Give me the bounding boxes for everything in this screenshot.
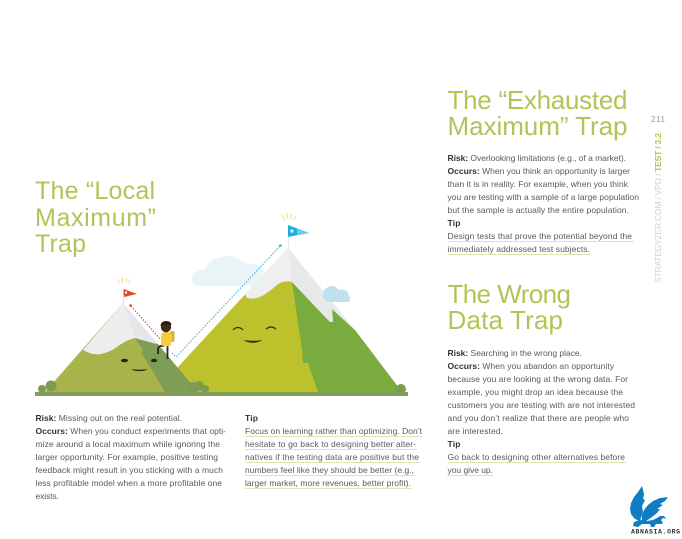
heading: The Local Maximum Trap: Maximum” [35, 204, 156, 232]
icon: griffin [630, 486, 668, 527]
cloud: blue at right [323, 286, 350, 302]
text block: wrong data: example, you might drop an idea because the [448, 387, 623, 397]
text block: wrong data: Tip [448, 439, 460, 449]
sidebar: vertical section label: STRATEGYZER.COM / VPD / TEST / 3.2 [653, 133, 663, 283]
text block: exhausted maximum: than it is in reality. For example, when you think [448, 179, 629, 189]
text block: local maximum tip: Focus on learning rather than optimizing. Don’t [245, 426, 423, 436]
text block: local maximum risk: less profitable model when a more profitable one [36, 478, 222, 488]
flag: red on small peak [117, 278, 137, 304]
heading: The Wrong Data Trap [448, 279, 571, 335]
text block: local maximum risk: Occurs: When you conduct experiments that opti- [36, 426, 226, 436]
bushes [38, 380, 406, 394]
text block: local maximum risk: exists. [36, 491, 59, 501]
text block: wrong data: you give up. [448, 465, 493, 475]
text block: local maximum risk: feedback might result in you sticking with a much [36, 465, 223, 475]
text block: exhausted maximum: Tip [448, 218, 460, 228]
text block: wrong data: are interested. [448, 426, 503, 436]
heading: The Wrong Data Trap: Data Trap [448, 305, 563, 335]
flag: blue on big peak [282, 213, 309, 249]
ground [35, 392, 408, 396]
big mountain [160, 248, 402, 392]
arrow: red dotted path [129, 304, 160, 339]
text block: local maximum tip: hesitate to go back to designing better alter- [245, 439, 416, 449]
text block: local maximum risk: larger opportunity. For example, positive testing [36, 452, 218, 462]
heading: The Wrong Data Trap: The Wrong [448, 279, 571, 309]
text block: exhausted maximum: Risk: Overlooking limitations (e.g., of a market). [448, 153, 626, 163]
text block: local maximum risk: Risk: Missing out on the real potential. [36, 413, 182, 423]
text block: local maximum risk [36, 413, 226, 501]
heading: The Local Maximum Trap: Trap [35, 230, 86, 258]
logo: griffin with wordmark [630, 486, 680, 536]
text block: wrong data: because you are looking at the wrong data. For [448, 374, 628, 384]
text block: wrong data: Occurs: When you abandon an opportunity [448, 361, 615, 371]
text block: exhausted maximum: you are testing with a sample of a large population [448, 192, 639, 202]
heading: The Local Maximum Trap [35, 177, 156, 258]
text block: wrong data [448, 348, 635, 476]
text block: local maximum tip: larger market, more revenues, better profit). [245, 478, 411, 488]
arrow: blue dotted path [172, 244, 282, 357]
text block: local maximum tip [245, 413, 423, 488]
text block: wrong data: customers you are testing with are not interested [448, 400, 635, 410]
wordmark: ABNASIA.ORG [631, 528, 680, 536]
heading: The Exhausted Maximum Trap: Maximum” Trap [448, 111, 628, 141]
climber [158, 321, 174, 359]
illustration: two mountains with climber [35, 213, 408, 396]
heading: The Exhausted Maximum Trap: The “Exhausted [448, 85, 628, 115]
text block: exhausted maximum [448, 153, 639, 254]
text block: local maximum tip: Tip [245, 413, 258, 423]
text block: exhausted maximum: but the sample is actually the entire population. [448, 205, 629, 215]
text block: exhausted maximum: Occurs: When you think an opportunity is larger [448, 166, 630, 176]
text block: exhausted maximum: immediately addressed test subjects. [448, 244, 590, 254]
text block: wrong data: and you don’t realize that there are people who [448, 413, 629, 423]
text block: wrong data: Risk: Searching in the wrong place. [448, 348, 582, 358]
text block: exhausted maximum: Design tests that prove the potential beyond the [448, 231, 632, 241]
small mountain [45, 303, 198, 392]
text block: local maximum risk: mize around a local maximum while ignoring the [36, 439, 220, 449]
heading: The Local Maximum Trap: The “Local [35, 177, 155, 205]
text block: wrong data: Go back to designing other alternatives before [448, 452, 625, 462]
cloud: pale behind big mountain [192, 256, 264, 286]
text block: local maximum tip: natives if the testing data are positive but the [245, 452, 419, 462]
page number: 211 [651, 115, 666, 124]
text block: local maximum tip: numbers feel like they should be better (e.g., [245, 465, 414, 475]
heading: The Exhausted Maximum Trap [448, 85, 628, 141]
